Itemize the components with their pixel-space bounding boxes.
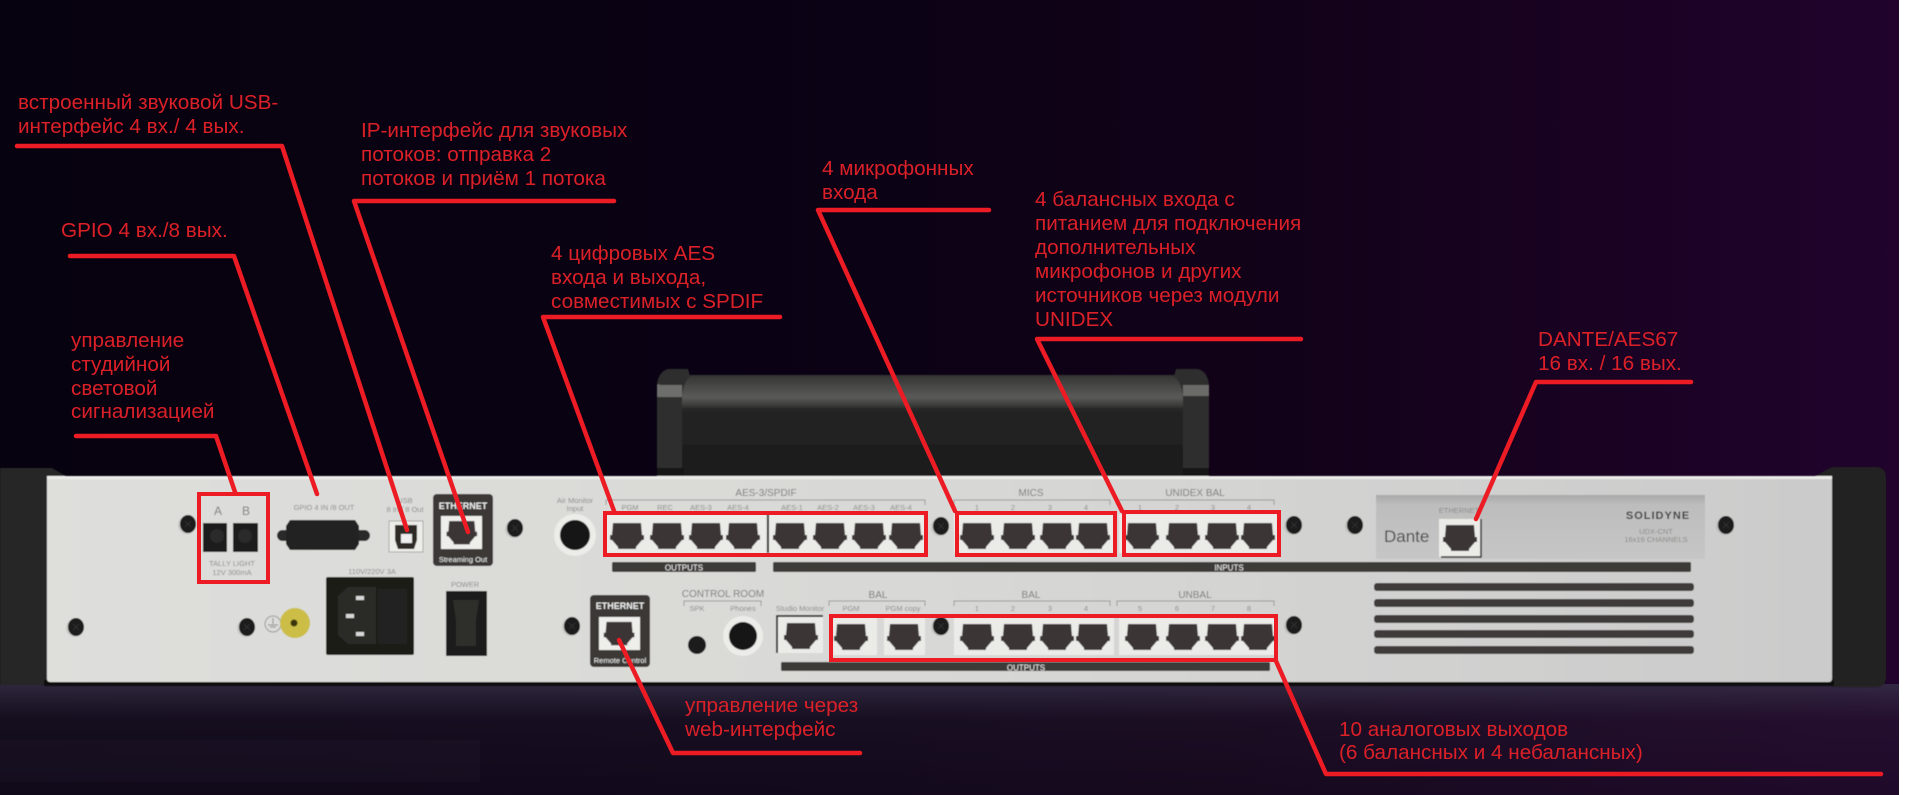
callout: balanced inputs UNIDEX bbox=[1035, 188, 1301, 555]
BAL PGM outputs: PGM copy bbox=[885, 604, 921, 613]
callout: AES inputs and outputs: совместимых с SPDIF bbox=[551, 290, 763, 313]
OUTPUTS bar, second row: OUTPUTS bbox=[1007, 664, 1045, 672]
right rack ear bbox=[1815, 467, 1886, 687]
power switch bbox=[446, 580, 487, 656]
AES group labels and ports: AES-1 bbox=[781, 503, 803, 512]
floor reflection bbox=[0, 684, 1899, 795]
remote control ethernet block: Remote Control bbox=[594, 656, 647, 665]
BAL outputs 1-4: 2 bbox=[1011, 604, 1015, 613]
callout: tally light control bbox=[71, 329, 268, 582]
callout: tally light control: студийной bbox=[71, 353, 170, 376]
control room group: SPK bbox=[689, 604, 705, 613]
tally connectors bbox=[203, 504, 258, 577]
USB connector: 8 In / 8 Out bbox=[386, 505, 424, 514]
callout: analog outputs: 10 аналоговых выходов bbox=[1339, 718, 1568, 741]
callout: IP streams: потоков и приём 1 потока bbox=[361, 167, 606, 190]
callout: Dante AES67: 16 вх. / 16 вых. bbox=[1538, 352, 1682, 375]
remote control ethernet block: ETHERNET bbox=[596, 601, 645, 611]
AES group labels and ports bbox=[606, 488, 925, 553]
callout: web interface control bbox=[619, 640, 860, 753]
Dante module: Dante bbox=[1384, 527, 1429, 546]
floor band bbox=[0, 740, 480, 782]
MICS group: 1 bbox=[975, 503, 979, 512]
under-panel shadow bbox=[44, 680, 1834, 686]
Dante module: SOLIDYNE bbox=[1626, 510, 1690, 522]
UNIDEX BAL group: UNIDEX BAL bbox=[1165, 488, 1225, 499]
studio monitor port bbox=[776, 604, 825, 653]
AES group labels and ports: PGM bbox=[621, 503, 639, 512]
Dante module: ETHERNET bbox=[1439, 506, 1480, 515]
BAL PGM outputs: BAL bbox=[869, 590, 888, 601]
AES group labels and ports: AES-3/SPDIF bbox=[735, 488, 797, 499]
studio monitor port: Studio Monitor bbox=[776, 604, 825, 613]
power inlet bbox=[326, 567, 414, 655]
callout: analog outputs: (6 балансных и 4 небалансных) bbox=[1339, 741, 1643, 764]
air monitor jack: Input bbox=[567, 504, 584, 513]
USB connector bbox=[386, 496, 424, 552]
callout: balanced inputs UNIDEX: UNIDEX bbox=[1035, 308, 1113, 331]
callout: Dante AES67 bbox=[1476, 328, 1691, 519]
BAL outputs 1-4 bbox=[954, 590, 1114, 655]
OUTPUTS bar, first row: OUTPUTS bbox=[665, 564, 703, 572]
control room group: Phones bbox=[730, 604, 756, 613]
UNIDEX BAL group: 2 bbox=[1175, 503, 1179, 512]
control room group bbox=[682, 589, 764, 656]
callout: balanced inputs UNIDEX: питанием для подключения bbox=[1035, 212, 1301, 235]
BAL outputs 1-4: BAL bbox=[1022, 590, 1041, 601]
power switch: POWER bbox=[451, 580, 480, 589]
device: rear panel unit bbox=[0, 369, 1886, 687]
callout: Dante AES67: DANTE/AES67 bbox=[1538, 328, 1678, 351]
INPUTS bar: INPUTS bbox=[1214, 564, 1244, 572]
callout: microphone inputs: 4 микрофонных bbox=[822, 157, 974, 180]
Dante module bbox=[1376, 495, 1705, 559]
BAL outputs 1-4: 1 bbox=[975, 604, 979, 613]
tally connectors: B bbox=[242, 504, 250, 518]
BAL PGM outputs: PGM bbox=[842, 604, 860, 613]
callout: AES inputs and outputs: 4 цифровых AES bbox=[551, 242, 715, 265]
GPIO connector: GPIO 4 IN /8 OUT bbox=[294, 503, 355, 512]
callout: GPIO: GPIO 4 вх./8 вых. bbox=[61, 219, 228, 242]
callout: web interface control: web-интерфейс bbox=[684, 718, 836, 741]
BAL PGM outputs bbox=[829, 590, 925, 655]
INPUTS bar bbox=[773, 562, 1691, 572]
AES group labels and ports: AES-4 bbox=[890, 503, 912, 512]
callout: microphone inputs bbox=[818, 157, 1115, 555]
callout: AES inputs and outputs bbox=[543, 242, 926, 555]
MICS group: 2 bbox=[1011, 503, 1015, 512]
GPIO connector bbox=[277, 503, 370, 550]
handle bbox=[657, 369, 1209, 476]
air monitor jack: Air Monitor bbox=[557, 496, 594, 505]
MICS group: MICS bbox=[1018, 488, 1044, 499]
ground stud bbox=[265, 608, 310, 638]
control room group: CONTROL ROOM bbox=[682, 589, 764, 600]
callout: balanced inputs UNIDEX: источников через модули bbox=[1035, 284, 1279, 307]
callout: IP streams: IP-интерфейс для звуковых bbox=[361, 119, 628, 142]
streaming ethernet block bbox=[433, 494, 493, 566]
OUTPUTS bar, second row bbox=[781, 662, 1270, 672]
remote control ethernet block bbox=[590, 595, 650, 667]
AES group labels and ports: REC bbox=[657, 503, 673, 512]
streaming ethernet block: Streaming Out bbox=[439, 555, 488, 564]
USB connector: USB bbox=[397, 496, 413, 505]
UNBAL outputs 5-8: 7 bbox=[1211, 604, 1215, 613]
callout: AES inputs and outputs: входа и выхода, bbox=[551, 266, 706, 289]
UNBAL outputs 5-8: 6 bbox=[1175, 604, 1179, 613]
tally connectors: TALLY LIGHT bbox=[209, 559, 255, 568]
callout: USB interface bbox=[17, 91, 407, 530]
callout: balanced inputs UNIDEX: микрофонов и других bbox=[1035, 260, 1242, 283]
screws bbox=[66, 515, 1734, 637]
left rack ear bbox=[0, 468, 66, 685]
AES group labels and ports: AES-3 bbox=[690, 503, 712, 512]
callout: tally light control: сигнализацией bbox=[71, 400, 214, 423]
callout: analog outputs bbox=[831, 616, 1881, 774]
UNIDEX BAL group bbox=[1117, 488, 1277, 553]
MICS group: 4 bbox=[1084, 503, 1088, 512]
BAL outputs 1-4: 3 bbox=[1048, 604, 1052, 613]
AES group labels and ports: AES-4 bbox=[727, 503, 749, 512]
callout: IP streams: потоков: отправка 2 bbox=[361, 143, 551, 166]
streaming ethernet block: ETHERNET bbox=[439, 501, 488, 511]
UNIDEX BAL group: 3 bbox=[1211, 503, 1215, 512]
callout: tally light control: световой bbox=[71, 377, 158, 400]
UNBAL outputs 5-8: UNBAL bbox=[1178, 590, 1212, 601]
tally connectors: A bbox=[214, 504, 222, 518]
callout: GPIO bbox=[61, 219, 317, 494]
UNBAL outputs 5-8 bbox=[1117, 590, 1277, 655]
UNBAL outputs 5-8: 8 bbox=[1247, 604, 1251, 613]
callout: USB interface: интерфейс 4 вх./ 4 вых. bbox=[18, 115, 244, 138]
callout: balanced inputs UNIDEX: дополнительных bbox=[1035, 236, 1196, 259]
callout: web interface control: управление через bbox=[685, 694, 858, 717]
ventilation slots bbox=[1374, 583, 1694, 654]
callout: balanced inputs UNIDEX: 4 балансных входа с bbox=[1035, 188, 1235, 211]
callout: tally light control: управление bbox=[71, 329, 184, 352]
UNIDEX BAL group: 1 bbox=[1138, 503, 1142, 512]
callout: USB interface: встроенный звуковой USB- bbox=[18, 91, 278, 114]
MICS group bbox=[954, 488, 1114, 553]
tally connectors: 12V 300mA bbox=[212, 568, 252, 577]
UNBAL outputs 5-8: 5 bbox=[1138, 604, 1142, 613]
callout: microphone inputs: входа bbox=[822, 181, 878, 204]
power inlet: 110V/220V 3A bbox=[348, 567, 396, 576]
BAL outputs 1-4: 4 bbox=[1084, 604, 1088, 613]
Dante module: UDX-CNT bbox=[1639, 527, 1673, 536]
front plate bbox=[47, 476, 1832, 682]
UNIDEX BAL group: 4 bbox=[1247, 503, 1251, 512]
callout: IP streams bbox=[354, 119, 628, 532]
OUTPUTS bar, first row bbox=[612, 562, 756, 572]
MICS group: 3 bbox=[1048, 503, 1052, 512]
AES group labels and ports: AES-2 bbox=[817, 503, 839, 512]
air monitor jack bbox=[554, 496, 596, 556]
Dante module: 16x16 CHANNELS bbox=[1624, 535, 1688, 544]
AES group labels and ports: AES-3 bbox=[853, 503, 875, 512]
